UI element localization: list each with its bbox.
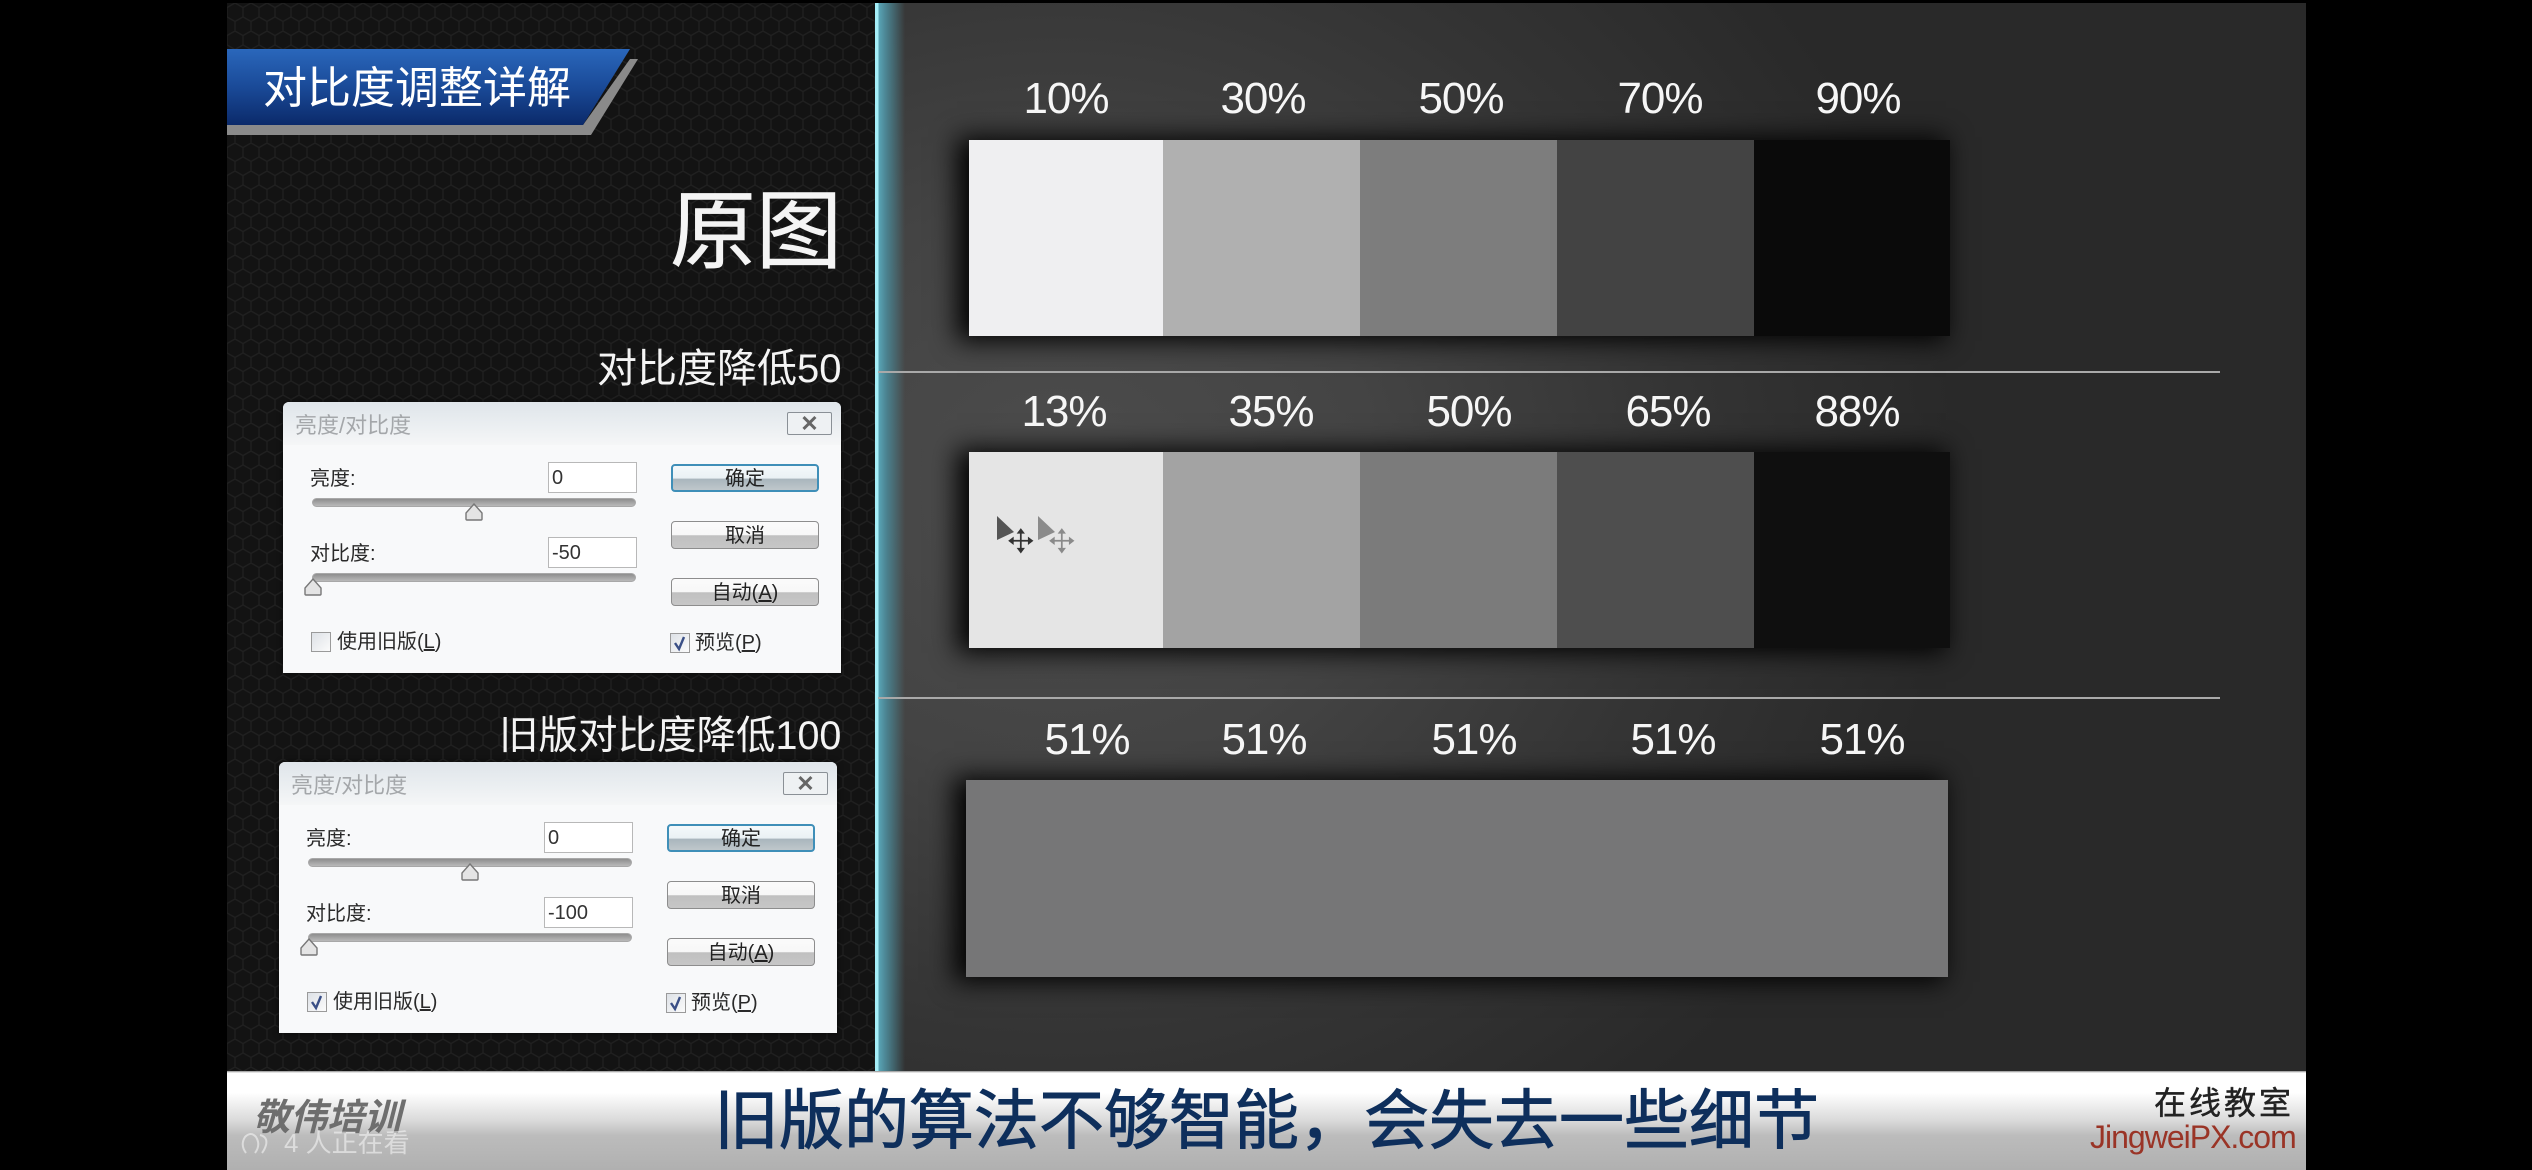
brightness label: 亮度: [306,828,352,850]
subtitle text: 旧版的算法不够智能，会失去一些细节 [714,1084,1819,1157]
close button [783,772,828,795]
dialog title: 亮度/对比度 [295,413,411,438]
contrast input: -100 [548,902,588,924]
brightness input [548,462,637,493]
label 51% fifth: 51% [1819,715,1905,764]
close button: ✕ [796,771,815,796]
separator line two [878,697,2220,699]
brightness label: 亮度: [310,468,356,490]
close button [787,412,832,435]
brightness input [544,822,633,853]
contrast thumb [304,578,322,596]
gray swatch bar [969,452,1950,648]
label 51% second: 51% [1221,715,1307,764]
brightness slider [308,858,632,867]
icon: eyedropper move cursors [997,516,1074,554]
preview label: 预览(P) [691,992,758,1014]
contrast input [544,897,633,928]
heading: contrast minus 50: 对比度降低50 [597,347,842,391]
cancel button [667,881,815,909]
cancel button: 取消 [725,525,765,547]
legacy checkbox checked [307,992,327,1012]
brightness thumb [465,503,483,521]
panel: left dark honeycomb background [227,3,875,1071]
label 65%: 65% [1625,387,1711,436]
dialog: legacy contrast minus 100 [279,762,837,1033]
dialog title bar [283,402,841,445]
label 10%: 10% [1023,74,1109,123]
row: contrast minus 50 tone bar [942,387,1957,668]
OK button: 确定 [725,468,765,490]
preview checkbox checked [670,633,690,653]
label 13%: 13% [1021,387,1107,436]
subtitle band [227,1071,2306,1170]
label 88%: 88% [1814,387,1900,436]
label 70%: 70% [1617,74,1703,123]
heading: original image: 原图 [670,184,842,280]
separator line one [878,371,2220,373]
title banner: 对比度调整详解 [263,64,571,113]
OK button: 确定 [721,828,761,850]
gray swatch bar [969,140,1950,336]
online classroom label: 在线教室 [2154,1085,2294,1121]
legacy label: 使用旧版(L) [333,991,437,1013]
label 50%: 50% [1418,74,1504,123]
contrast input [548,537,637,568]
cancel button [671,521,819,549]
contrast label: 对比度: [306,903,372,925]
contrast slider [312,573,636,582]
close button: ✕ [800,411,819,436]
label 35%: 35% [1228,387,1314,436]
label 90%: 90% [1815,74,1901,123]
preview checkbox checked [666,993,686,1013]
brightness slider [312,498,636,507]
auto button [667,938,815,966]
dialog title: 亮度/对比度 [291,773,407,798]
label 51% fourth: 51% [1630,715,1716,764]
row: legacy contrast minus 100 tone bar [940,715,1954,995]
website label: JingweiPX.com [2090,1119,2296,1155]
contrast input: -50 [552,542,581,564]
cyan vertical divider [875,3,905,1071]
contrast label: 对比度: [310,543,376,565]
heading: legacy contrast minus 100: 旧版对比度降低100 [499,714,841,758]
auto button: 自动(A) [708,942,774,964]
auto button: 自动(A) [712,582,778,604]
dialog title bar [279,762,837,805]
brightness thumb [461,863,479,881]
OK button [667,824,815,852]
OK button [671,464,819,492]
label 50%: 50% [1426,387,1512,436]
brightness input: 0 [552,467,563,489]
auto button [671,578,819,606]
legacy label: 使用旧版(L) [337,631,441,653]
contrast thumb [300,938,318,956]
label 51% third: 51% [1431,715,1517,764]
flat gray bar [966,780,1948,977]
label 51% first: 51% [1044,715,1130,764]
legacy checkbox unchecked [311,632,331,652]
cancel button: 取消 [721,885,761,907]
contrast slider [308,933,632,942]
panel: right gray gradient background [878,3,2306,1071]
viewer count overlay: 4 人正在看 [284,1128,410,1158]
label 30%: 30% [1220,74,1306,123]
title banner [227,49,638,135]
logo: Jingwei training: 敬伟培训 [253,1097,401,1138]
preview label: 预览(P) [695,632,762,654]
brightness input: 0 [548,827,559,849]
dialog: contrast minus 50 [283,402,841,673]
viewer icon [242,1133,268,1154]
row: original tone bar [942,74,1956,356]
